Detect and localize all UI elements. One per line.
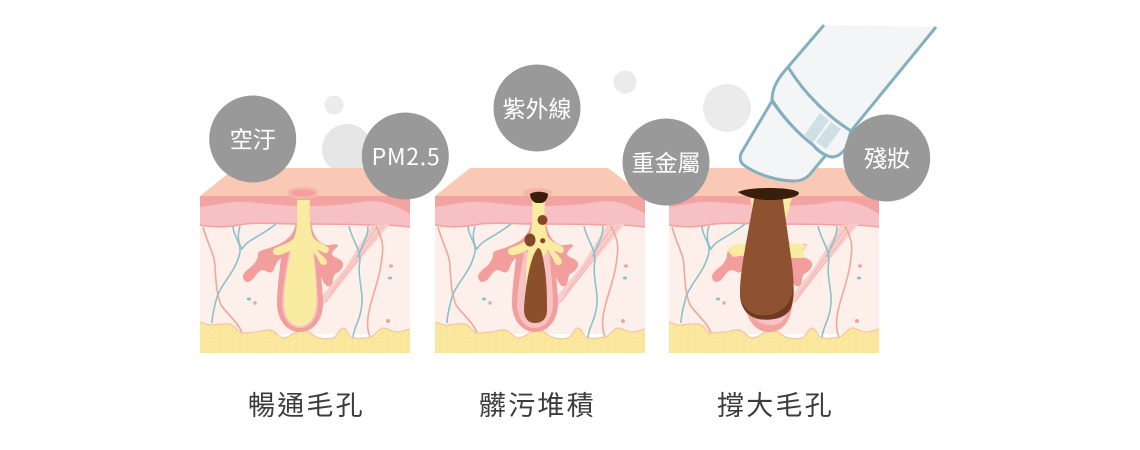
bubble: 紫外線 bbox=[494, 64, 580, 152]
device stripes bbox=[804, 113, 841, 149]
label: 暢通毛孔: 暢通毛孔 bbox=[248, 384, 365, 423]
decorative bubble: small, panel 1 bbox=[324, 96, 344, 114]
debris dot bbox=[540, 238, 545, 243]
bubble: PM2.5 bbox=[362, 112, 449, 200]
device collar bbox=[772, 67, 851, 157]
bubble: PM2.5: PM2.5 bbox=[372, 138, 440, 172]
decorative bubble: small, panel 2 bbox=[614, 70, 636, 94]
label: 撐大毛孔: 撐大毛孔 bbox=[717, 384, 834, 423]
bubble: 重金屬 bbox=[622, 118, 710, 206]
enlarged follicle wall bbox=[745, 305, 792, 331]
brown sebum plug in follicle bbox=[524, 248, 547, 323]
panel: clear pore skin diagram bbox=[200, 168, 410, 353]
panel: clogged pore skin diagram bbox=[435, 168, 645, 353]
decorative bubble: large, panel 1 bbox=[322, 124, 372, 174]
device handle bbox=[788, 25, 936, 131]
bubble: 殘妝: 殘妝 bbox=[864, 140, 910, 174]
panel: enlarged pore skin diagram bbox=[669, 168, 879, 353]
decorative bubble: large, panel 3 bbox=[703, 84, 751, 132]
large brown plug bbox=[740, 194, 794, 320]
device tip bbox=[740, 101, 826, 181]
icon: cleansing device bbox=[740, 25, 936, 181]
debris dot bbox=[538, 215, 548, 225]
dark pore blockage bbox=[738, 188, 799, 200]
pore blockage bbox=[530, 192, 548, 203]
bubble: 紫外線: 紫外線 bbox=[502, 90, 572, 124]
bubble: 殘妝 bbox=[843, 114, 930, 202]
bubble: 空汙 bbox=[209, 96, 296, 182]
debris dot bbox=[524, 234, 536, 246]
bubble: 重金屬: 重金屬 bbox=[632, 144, 700, 178]
label: 髒污堆積: 髒污堆積 bbox=[479, 384, 596, 423]
bubble: 空汙: 空汙 bbox=[230, 120, 276, 154]
